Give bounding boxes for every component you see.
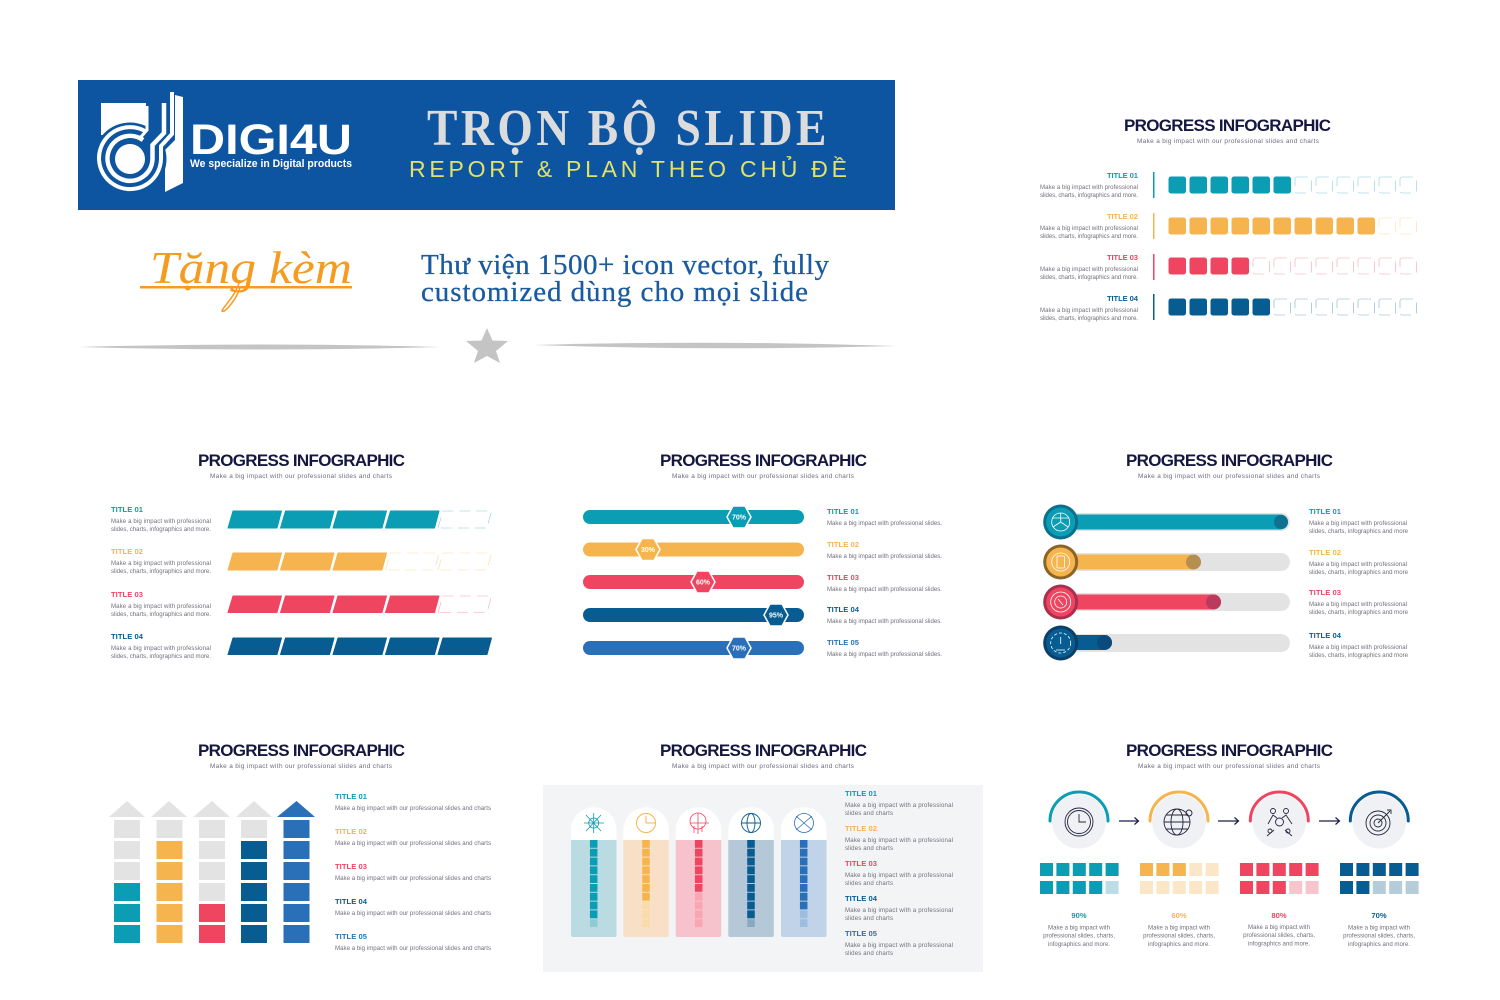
row labels: Make a big impact with professional: [111, 645, 211, 652]
step captions: infographics and more.: [1248, 940, 1310, 948]
bonus description: [421, 249, 830, 308]
slider bars: [583, 510, 804, 655]
slide: arrow columns: [109, 741, 491, 952]
row labels: Make a big impact with our professional slides and charts: [335, 910, 491, 917]
banner subtitle: REPORT & PLAN THEO CHỦ ĐỀ: [409, 154, 847, 182]
row labels: TITLE 04: [111, 632, 144, 641]
row labels: slides, charts, infographics and more.: [111, 568, 211, 575]
icon: globe: [1164, 809, 1192, 835]
arrow heads: [109, 801, 315, 817]
icon: circle badge 1: [1043, 504, 1078, 540]
row labels: TITLE 02: [111, 547, 143, 556]
row labels: Make a big impact with professional slides.: [827, 651, 942, 658]
row labels: [827, 507, 942, 658]
step captions: infographics and more.: [1148, 941, 1210, 948]
row labels: TITLE 04: [335, 897, 368, 906]
grey tracks: [1060, 513, 1290, 652]
step captions: Make a big impact with: [1048, 924, 1110, 932]
bonus description: customized dùng cho mọi slide: [421, 276, 808, 308]
segments row 2: [228, 553, 492, 570]
row labels: TITLE 04: [1309, 631, 1342, 640]
row labels: Make a big impact with our professional slides and charts: [335, 875, 491, 882]
row labels: Make a big impact with a professional: [845, 907, 953, 914]
row labels: Make a big impact with professional slides.: [827, 520, 942, 527]
arrow 3: [1319, 818, 1340, 824]
row labels: TITLE 02: [845, 824, 877, 833]
row labels: Make a big impact with professional: [111, 518, 211, 525]
icon: globe: [742, 814, 760, 832]
slide: circular steps: [1040, 741, 1419, 948]
heading: PROGRESS INFOGRAPHIC: [198, 741, 405, 760]
segments row 4: [228, 638, 492, 654]
step captions: [1043, 911, 1415, 948]
row labels: [1309, 507, 1409, 659]
slide: hexagon sliders: [583, 451, 942, 659]
row labels: slides, charts, infographics and more.: [111, 611, 211, 618]
row labels: TITLE 05: [845, 929, 878, 938]
row labels: TITLE 04: [845, 894, 878, 903]
slide: arch cards: [543, 741, 983, 972]
step captions: Make a big impact with: [1248, 924, 1310, 931]
subheading: Make a big impact with our professional slides and charts: [210, 763, 392, 770]
row labels: [335, 792, 491, 952]
step captions: 80%: [1271, 911, 1287, 920]
progress squares row 2: [1169, 218, 1416, 234]
slide: parallelogram progress: [111, 451, 492, 660]
row labels: TITLE 05: [827, 638, 860, 647]
icon: team: [1267, 808, 1292, 836]
row labels: slides and charts: [845, 810, 893, 817]
row labels: slides, charts, infographics and more: [1309, 569, 1409, 576]
row labels: TITLE 02: [1107, 212, 1138, 221]
icon: crossed circle: [794, 814, 814, 832]
percent labels: 70%: [732, 514, 747, 522]
icon: brain circuit: [690, 813, 709, 834]
icon: star: [466, 328, 508, 363]
bonus script label: Tặng kèm: [150, 242, 352, 293]
pale card bodies: [571, 840, 826, 937]
hexagon markers: [636, 506, 788, 659]
icon: circle badge 4: [1043, 626, 1078, 660]
row labels: TITLE 01: [1107, 171, 1139, 180]
heading: PROGRESS INFOGRAPHIC: [660, 741, 867, 760]
row labels: TITLE 02: [827, 540, 859, 549]
row labels: slides, charts, infographics and more.: [1040, 192, 1138, 199]
percent labels: [641, 514, 784, 652]
arrow 1: [1119, 818, 1138, 824]
icon: clock: [1065, 808, 1093, 836]
row labels: TITLE 01: [111, 505, 144, 514]
row labels: Make a big impact with our professional slides and charts: [335, 840, 491, 847]
heading: PROGRESS INFOGRAPHIC: [1124, 116, 1331, 135]
filled squares: [1040, 870, 1419, 888]
row labels: [845, 789, 953, 957]
row labels: Make a big impact with a professional: [845, 872, 953, 879]
row labels: Make a big impact with professional: [111, 603, 211, 610]
row labels: TITLE 01: [335, 792, 368, 801]
step captions: Make a big impact with: [1348, 924, 1410, 932]
heading: PROGRESS INFOGRAPHIC: [1126, 741, 1333, 760]
row labels: TITLE 01: [845, 789, 878, 798]
row labels: TITLE 03: [1107, 253, 1138, 262]
row labels: TITLE 03: [111, 590, 143, 599]
step captions: infographics and more.: [1048, 941, 1110, 948]
pale strip cells: [594, 840, 804, 927]
row labels: Make a big impact with professional: [1309, 601, 1407, 608]
logo tagline: We specialize in Digital products: [190, 158, 352, 170]
heading: PROGRESS INFOGRAPHIC: [660, 451, 867, 470]
grey panel: [543, 785, 983, 972]
banner title: TRỌN BỘ SLIDE: [427, 99, 830, 157]
row labels: Make a big impact with professional: [1309, 644, 1407, 651]
percent labels: 95%: [769, 612, 784, 620]
heading: PROGRESS INFOGRAPHIC: [198, 451, 405, 470]
arcs: [1050, 792, 1408, 821]
step captions: 60%: [1171, 911, 1187, 920]
row labels: Make a big impact with professional: [1040, 307, 1138, 314]
step captions: professional slides, charts,: [1243, 932, 1315, 939]
heading: PROGRESS INFOGRAPHIC: [1126, 451, 1333, 470]
subheading: Make a big impact with our professional slides and charts: [672, 473, 854, 480]
segments row 1: [228, 511, 492, 528]
row labels: slides, charts, infographics and more.: [1040, 315, 1138, 322]
grey blocks: [127, 820, 254, 943]
step captions: Make a big impact with: [1148, 924, 1210, 932]
row labels: Make a big impact with professional: [1309, 520, 1407, 527]
row labels: slides, charts, infographics and more.: [111, 526, 211, 533]
step captions: professional slides, charts,: [1143, 932, 1215, 940]
bar end knobs: [1097, 515, 1288, 650]
step captions: 70%: [1371, 911, 1387, 920]
step captions: infographics and more.: [1348, 941, 1410, 948]
row labels: Make a big impact with a professional: [845, 942, 953, 949]
row labels: slides and charts: [845, 845, 893, 852]
subheading: Make a big impact with our professional slides and charts: [1137, 138, 1319, 145]
grey circles: [1052, 794, 1406, 848]
row labels: TITLE 02: [335, 827, 367, 836]
row rules: [1153, 172, 1154, 320]
row labels: slides, charts, infographics and more.: [1040, 274, 1138, 281]
progress squares row 4: [1169, 299, 1416, 315]
row labels: slides and charts: [845, 915, 893, 922]
icon: target: [1366, 810, 1391, 835]
row labels: TITLE 05: [335, 932, 368, 941]
row labels: slides, charts, infographics and more: [1309, 609, 1409, 616]
row labels: TITLE 04: [827, 605, 860, 614]
row labels: TITLE 03: [335, 862, 367, 871]
row labels: TITLE 04: [1107, 294, 1139, 303]
divider with star: [79, 328, 895, 363]
slide: icon progress bars: [1043, 451, 1409, 660]
row labels: slides, charts, infographics and more: [1309, 528, 1409, 535]
subheading: Make a big impact with our professional slides and charts: [210, 473, 392, 480]
percent labels: 70%: [732, 646, 747, 652]
row labels: slides and charts: [845, 950, 893, 957]
row labels: Make a big impact with our professional slides and charts: [335, 805, 491, 812]
subheading: Make a big impact with our professional slides and charts: [1138, 763, 1320, 770]
subheading: Make a big impact with our professional slides and charts: [672, 763, 854, 770]
pale squares: [1040, 870, 1419, 888]
white arches: [571, 807, 826, 840]
row labels: Make a big impact with a professional: [845, 802, 953, 809]
row labels: Make a big impact with professional: [111, 560, 211, 567]
icon: clock ring: [636, 814, 656, 832]
logo wordmark: DIGI4U: [190, 116, 352, 164]
row labels: Make a big impact with professional: [1040, 225, 1138, 232]
filled bars: [1060, 514, 1288, 650]
row labels: TITLE 01: [1309, 507, 1342, 516]
bonus script label: [140, 242, 352, 311]
row labels: Make a big impact with professional: [1040, 266, 1138, 273]
row labels: TITLE 01: [827, 507, 860, 516]
icon: circle badge 2: [1043, 544, 1078, 580]
row labels: slides, charts, infographics and more.: [1040, 233, 1138, 240]
row labels: Make a big impact with professional: [1040, 184, 1138, 191]
row labels: TITLE 03: [845, 859, 877, 868]
row labels: Make a big impact with a professional: [845, 837, 953, 844]
percent labels: 60%: [696, 580, 711, 586]
slide: square progress: [1040, 116, 1416, 322]
row labels: [1040, 171, 1139, 322]
logo mark: [94, 92, 183, 196]
progress squares row 1: [1169, 177, 1416, 193]
segments row 3: [228, 596, 492, 612]
row labels: Make a big impact with professional slides.: [827, 618, 942, 625]
row labels: [111, 505, 211, 660]
step captions: professional slides, charts,: [1343, 932, 1415, 940]
row labels: TITLE 03: [827, 573, 859, 582]
row labels: slides and charts: [845, 880, 893, 887]
row labels: TITLE 03: [1309, 588, 1341, 597]
icon: circle badge 3: [1043, 584, 1078, 620]
row labels: Make a big impact with professional slides.: [827, 553, 942, 560]
filled strip cells: [594, 840, 804, 918]
arrow 2: [1218, 818, 1238, 824]
progress squares row 3: [1169, 258, 1416, 274]
row labels: TITLE 02: [1309, 548, 1341, 557]
icon: network: [584, 813, 604, 833]
row labels: slides, charts, infographics and more.: [111, 653, 211, 660]
row labels: Make a big impact with professional: [1309, 561, 1407, 568]
row labels: Make a big impact with our professional slides and charts: [335, 945, 491, 952]
row labels: slides, charts, infographics and more: [1309, 652, 1409, 659]
step captions: professional slides, charts,: [1043, 932, 1115, 940]
row labels: Make a big impact with professional slides.: [827, 586, 942, 593]
subheading: Make a big impact with our professional slides and charts: [1138, 473, 1320, 480]
step captions: 90%: [1071, 911, 1087, 920]
filled blocks: [127, 820, 296, 943]
bonus description: Thư viện 1500+ icon vector, fully: [421, 249, 830, 281]
percent labels: 30%: [641, 547, 656, 554]
banner: [78, 80, 895, 210]
